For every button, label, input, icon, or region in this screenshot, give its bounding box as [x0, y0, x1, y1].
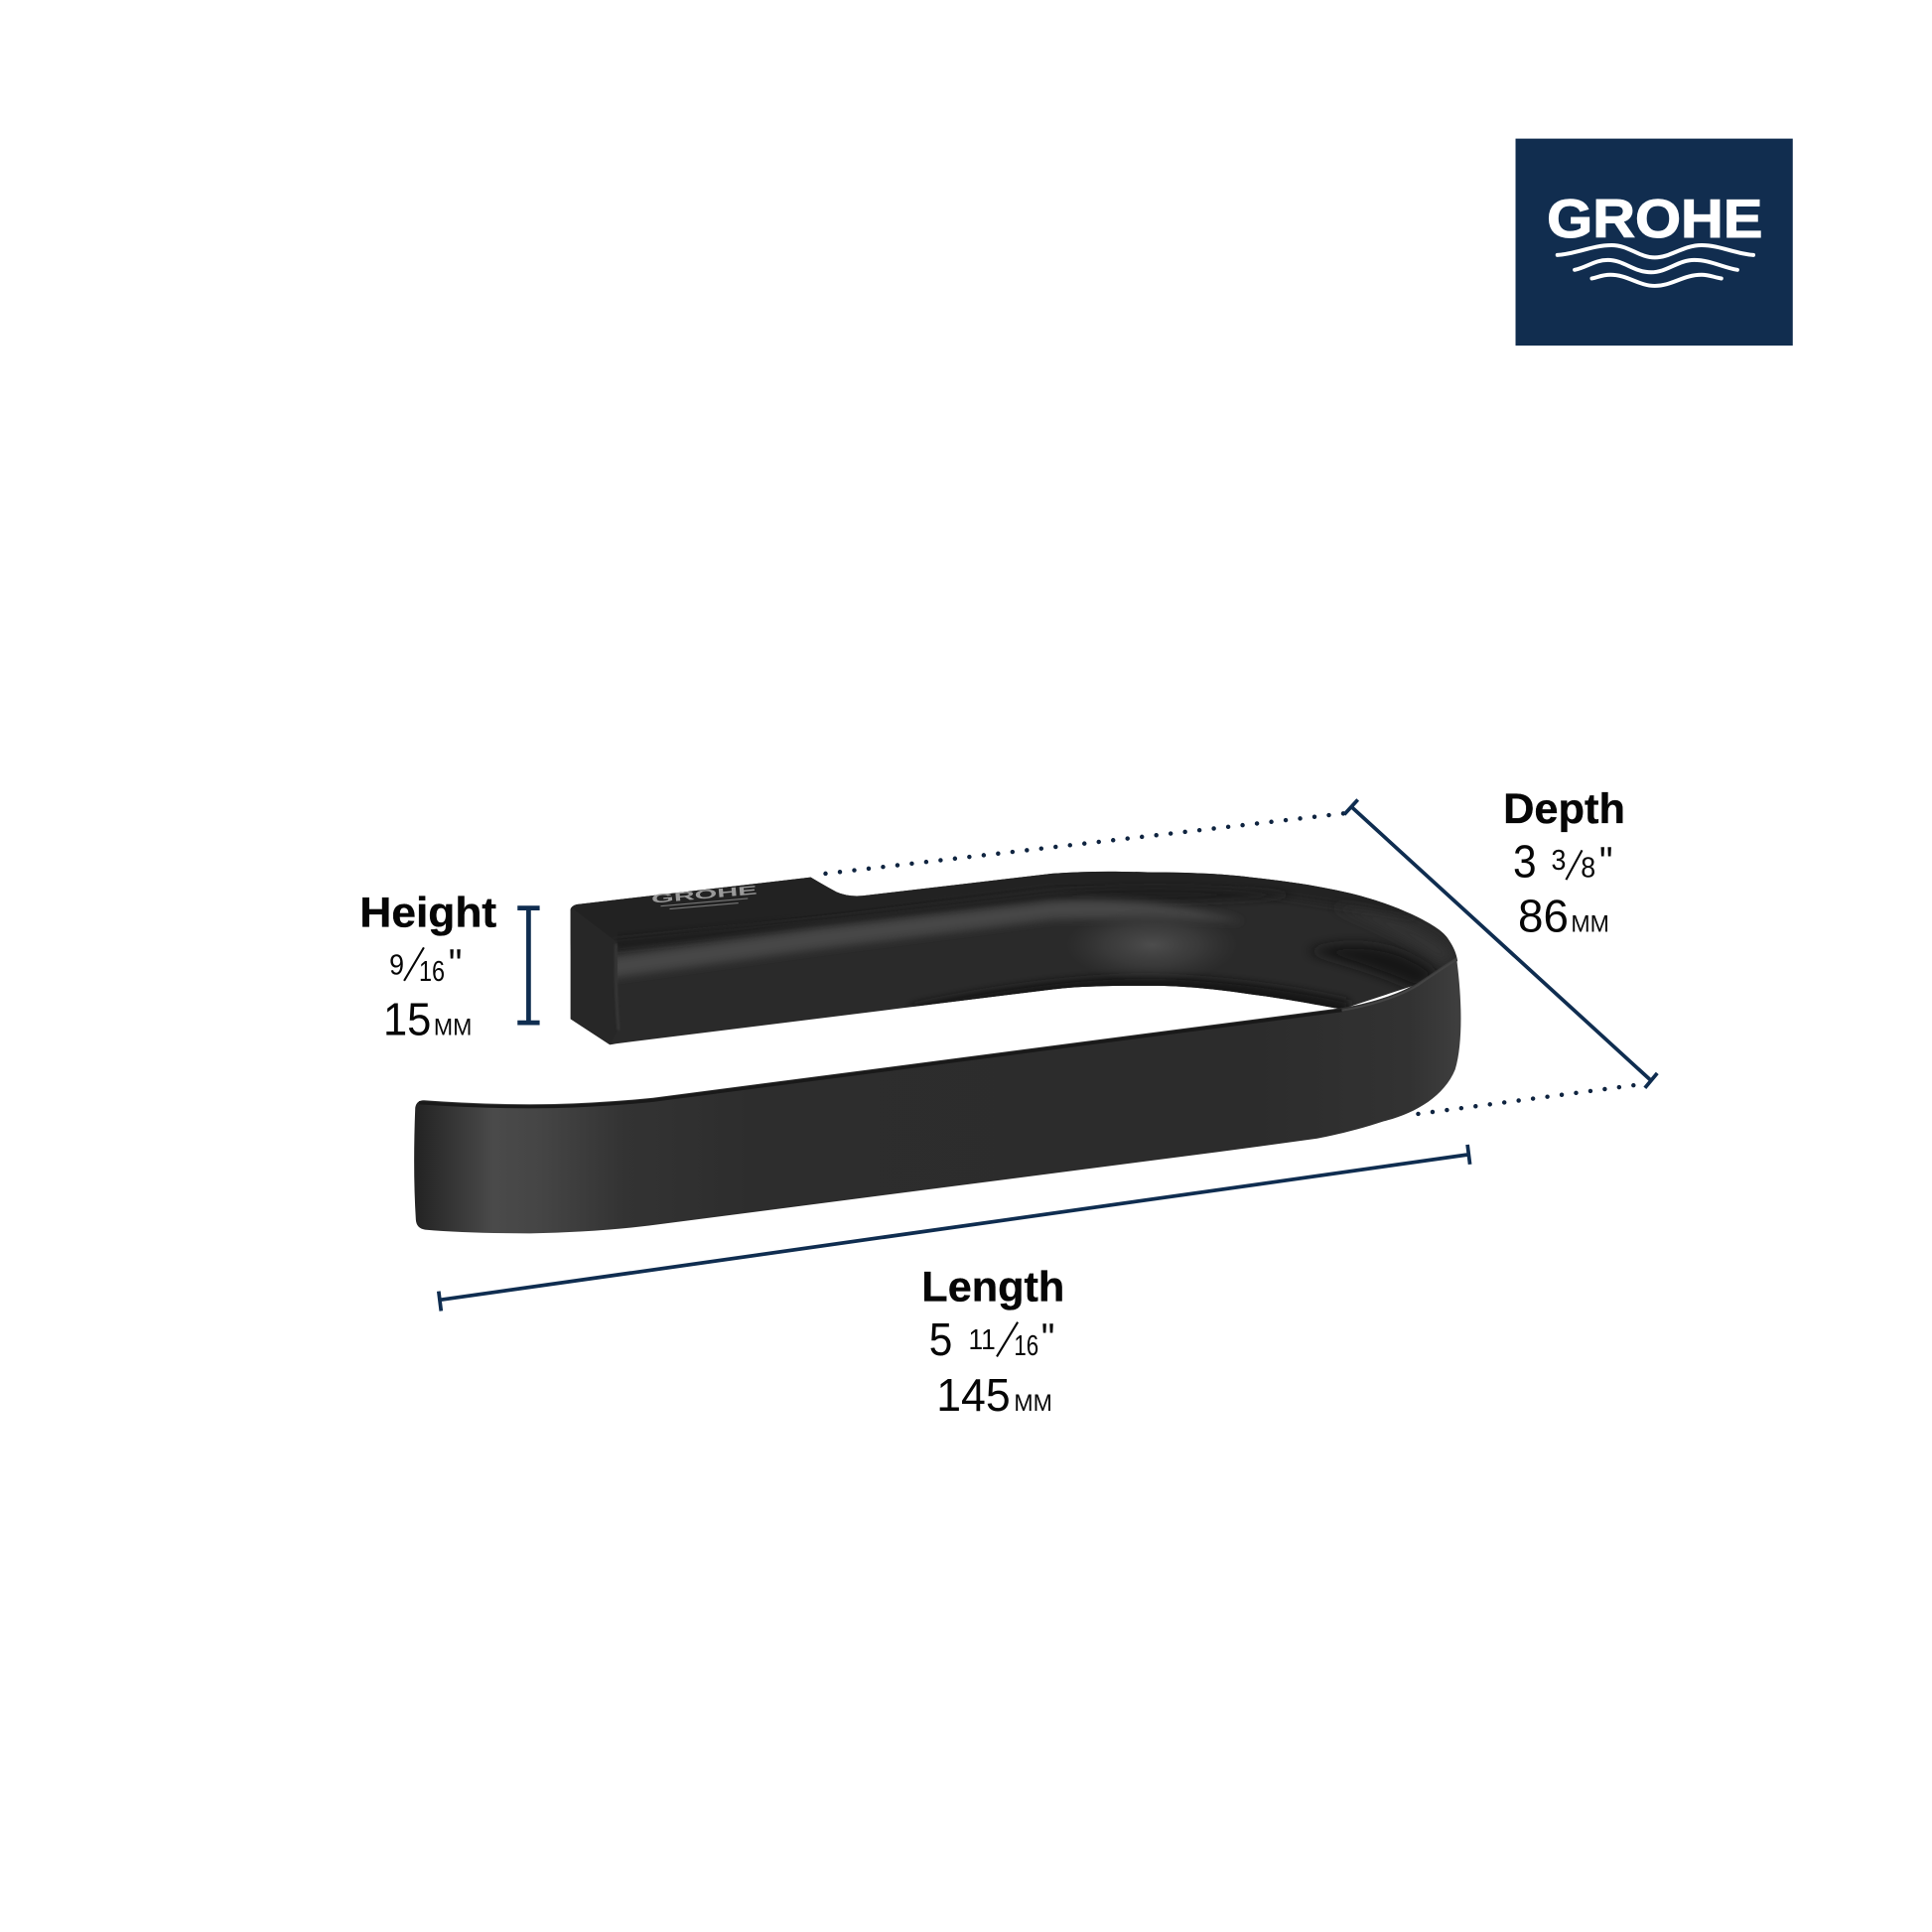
engraved mini logo: GROHE	[651, 883, 758, 906]
length inches: 5	[929, 1313, 952, 1365]
length inches: 16	[1014, 1330, 1038, 1362]
height inches: "	[449, 940, 462, 987]
length dimension line	[439, 1145, 1470, 1311]
dotted guide: depth bottom	[1418, 1084, 1641, 1114]
depth label	[1503, 785, 1625, 941]
depth inches	[1513, 836, 1613, 888]
logo: GROHE badge	[1516, 139, 1793, 345]
height millimetres: MM	[434, 1014, 472, 1039]
length inches: "	[1041, 1315, 1054, 1362]
length millimetres	[936, 1369, 1052, 1421]
product: matte black paper holder	[414, 850, 1478, 1233]
logo wordmark: GROHE	[1547, 189, 1762, 249]
block top face	[570, 872, 1417, 949]
infographic canvas	[362, 139, 1793, 1412]
height label	[359, 889, 496, 1044]
depth millimetres: 86	[1518, 890, 1569, 941]
front band of holder	[414, 957, 1460, 1233]
depth inches: 8	[1581, 853, 1595, 885]
depth millimetres: MM	[1571, 910, 1609, 936]
height inches: 16	[419, 956, 445, 988]
logo waves	[1558, 245, 1753, 286]
length inches	[929, 1313, 1054, 1365]
block end face	[570, 907, 610, 1044]
height heading: Height	[359, 889, 496, 935]
engraved mini logo	[651, 883, 759, 910]
height millimetres	[383, 993, 472, 1044]
depth inches: 3	[1513, 836, 1537, 888]
depth millimetres	[1518, 890, 1609, 941]
length millimetres: 145	[936, 1369, 1011, 1421]
length millimetres: MM	[1014, 1390, 1052, 1416]
height bracket	[517, 908, 540, 1023]
length inches: 11	[968, 1324, 996, 1356]
band rim	[419, 1011, 1342, 1107]
depth dimension line	[1344, 799, 1657, 1088]
length label	[921, 1264, 1064, 1421]
height inches	[389, 940, 462, 988]
height inches: 9	[389, 950, 404, 982]
length heading: Length	[921, 1264, 1064, 1311]
height millimetres: 15	[383, 993, 431, 1044]
back arm of holder	[570, 872, 1457, 1044]
depth heading: Depth	[1503, 785, 1625, 832]
dotted guide: depth top	[826, 813, 1345, 874]
depth inches: "	[1599, 838, 1613, 885]
depth inches: 3	[1552, 845, 1566, 877]
